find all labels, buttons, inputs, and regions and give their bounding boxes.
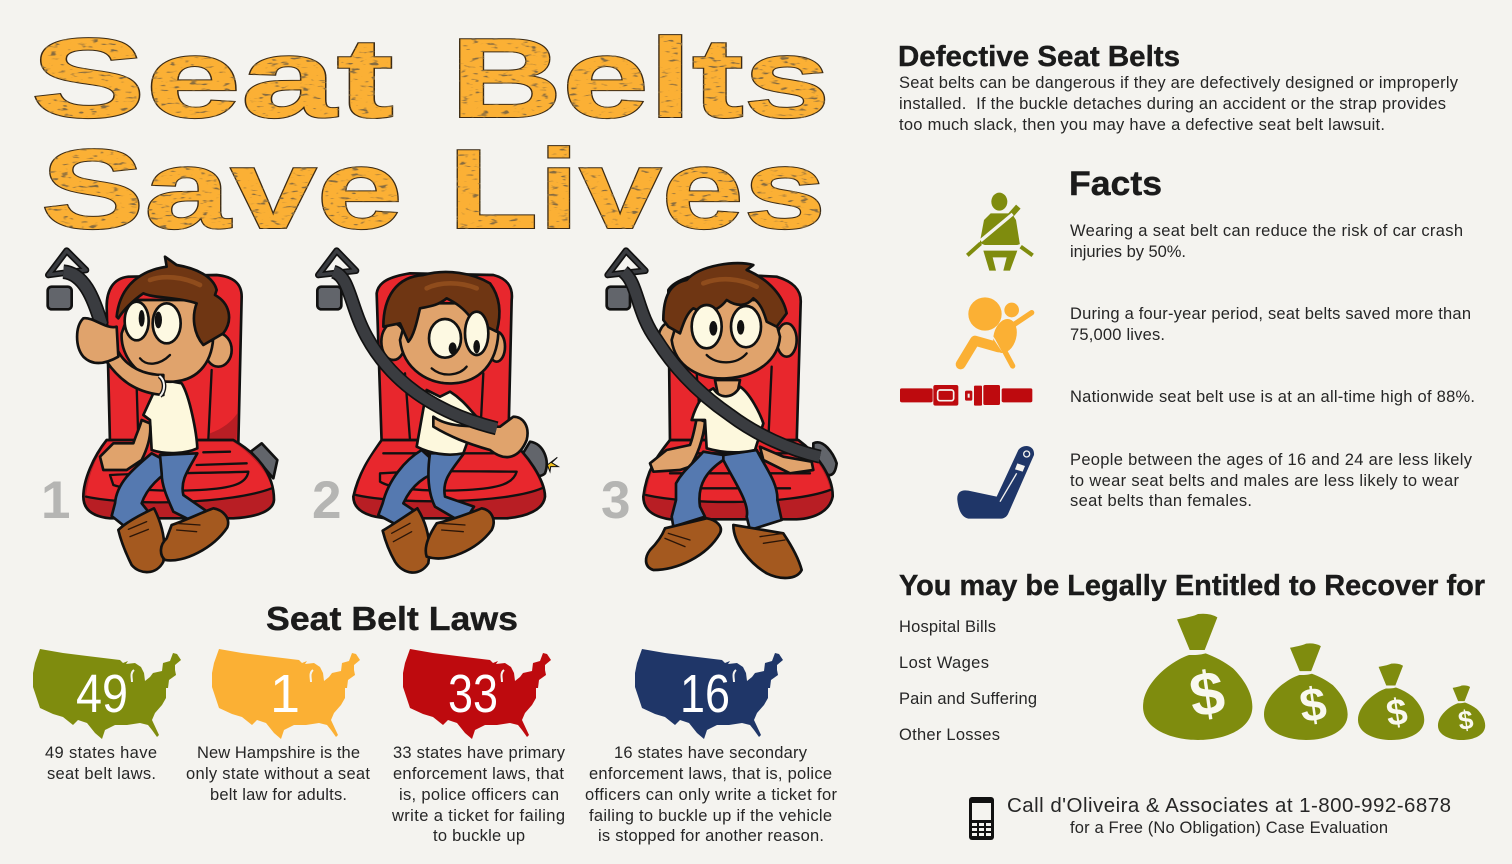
buckle receiver	[251, 443, 277, 478]
left leg	[378, 450, 443, 527]
icon: money bag small: $	[1384, 690, 1410, 734]
caption: secondary enforcement: 16 states have secondary	[614, 744, 808, 762]
left arm	[650, 418, 705, 472]
seat base	[643, 440, 833, 519]
lake notch	[132, 670, 134, 682]
seat back	[377, 273, 512, 443]
buckle receiver	[813, 442, 837, 475]
lake notch	[310, 670, 313, 682]
icon: seat	[957, 446, 1034, 519]
icon: red belt buckle	[900, 385, 1032, 406]
illustration: step 1 boy reaching for the belt	[41, 251, 277, 572]
call to action	[1007, 794, 1451, 837]
right shoe	[733, 525, 802, 578]
fact: lives saved: 75,000 lives.	[1070, 326, 1165, 344]
icon: money bag large: $	[1185, 658, 1229, 731]
icon: money bag smallest	[1438, 685, 1485, 740]
seat stripes	[697, 367, 772, 440]
left leg	[672, 452, 723, 527]
list: recoverable losses: Lost Wages	[899, 654, 989, 672]
fact: lives saved: During a four-year period, seat belts saved more than	[1070, 305, 1471, 323]
neck	[715, 380, 740, 397]
seat stripes	[405, 373, 483, 440]
right leg	[723, 450, 782, 530]
fact: young people and males	[1070, 451, 1473, 510]
shoe laces	[128, 522, 200, 537]
map: 33 states	[403, 649, 551, 739]
anchor triangle	[48, 251, 86, 275]
heading: facts: Facts	[1069, 165, 1162, 203]
face	[672, 300, 780, 378]
cushion stripes	[646, 453, 830, 502]
list: recoverable losses	[899, 618, 1037, 744]
hair	[383, 272, 499, 342]
sleeve cuff	[159, 376, 164, 396]
belt	[333, 272, 497, 428]
seat cushion top	[356, 442, 542, 501]
map: 16 states	[635, 649, 783, 739]
face	[400, 303, 498, 383]
list: recoverable losses: Other Losses	[899, 726, 1000, 744]
caption: New Hampshire: belt law for adults.	[210, 786, 347, 804]
right arm	[760, 447, 813, 473]
face	[122, 300, 213, 382]
caption: New Hampshire: only state without a seat	[186, 765, 370, 783]
fact: usage: Nationwide seat belt use is at an all-time high of 88%.	[1070, 388, 1475, 406]
title: Seat	[31, 14, 394, 141]
caption: primary enforcement	[391, 744, 566, 845]
number 49: 49	[76, 664, 128, 724]
icon: money bag medium	[1264, 643, 1348, 740]
hair	[117, 257, 229, 345]
hair highlight	[427, 283, 477, 288]
shirt	[417, 390, 477, 455]
lake notch	[734, 670, 736, 682]
number 1: 1	[270, 664, 300, 724]
cushion stripes	[356, 453, 542, 501]
icon: airbag	[961, 297, 1032, 366]
list: recoverable losses: Hospital Bills	[899, 618, 996, 636]
title	[31, 14, 830, 252]
fact: young people and males: to wear seat belts and males are less likely to wear	[1070, 472, 1460, 490]
seat cushion top	[646, 442, 830, 502]
text block: defective seat belts	[899, 74, 1459, 134]
right leg	[428, 453, 474, 523]
mouth	[432, 367, 467, 374]
heading: legally entitled: You may be Legally Entitled to Recover for	[899, 570, 1485, 602]
list: recoverable losses: Pain and Suffering	[899, 690, 1037, 708]
icon: money bag large	[1143, 614, 1252, 740]
lower arm and hand	[100, 420, 150, 470]
caption: New Hampshire	[186, 744, 370, 804]
seat stripes	[137, 370, 212, 440]
right shoe	[426, 508, 494, 558]
step number 2: 2	[312, 471, 341, 530]
fact: risk reduction	[1070, 222, 1463, 261]
icon: money bag smallest: $	[1456, 704, 1475, 736]
raised hand	[77, 318, 118, 363]
caption: secondary enforcement: enforcement laws, that is, police	[589, 765, 832, 783]
shirt	[692, 387, 763, 452]
left shoe	[118, 508, 164, 572]
belt	[623, 272, 820, 457]
anchor triangle	[318, 251, 356, 275]
buckle receiver	[520, 442, 547, 476]
anchor triangle	[608, 251, 645, 275]
left leg	[112, 453, 177, 527]
illustration: step 3 boy buckled in	[601, 251, 837, 578]
text block: defective seat belts: too much slack, then you may have a defective seat belt lawsuit.	[899, 116, 1385, 134]
call to action: Call d'Oliveira & Associates at 1-800-992-6878	[1007, 794, 1451, 817]
title: Belts	[450, 15, 830, 141]
icon: money bag small	[1358, 664, 1424, 740]
ears	[658, 323, 678, 357]
shoe laces	[665, 533, 785, 547]
caption: secondary enforcement: is stopped for another reason.	[598, 827, 824, 845]
left shoe	[646, 518, 721, 570]
shoe laces	[392, 523, 465, 542]
fact: young people and males: People between the ages of 16 and 24 are less likely	[1070, 451, 1473, 469]
caption: secondary enforcement	[585, 744, 838, 845]
seat back	[107, 275, 242, 443]
anchor triangle face	[318, 251, 356, 275]
seat base	[353, 440, 545, 518]
mouth	[140, 355, 170, 364]
number 33: 33	[448, 664, 498, 724]
ear	[205, 333, 232, 367]
step number 3: 3	[601, 471, 630, 530]
map: 1 state	[212, 649, 360, 739]
eyes	[125, 302, 149, 340]
mouth	[707, 353, 747, 362]
lake notch	[502, 670, 504, 682]
anchor clip	[607, 287, 630, 309]
anchor triangle face	[608, 251, 645, 275]
call to action: for a Free (No Obligation) Case Evaluation	[1070, 819, 1388, 837]
caption: primary enforcement: to buckle up	[433, 827, 525, 845]
number 16: 16	[680, 664, 730, 724]
buckle spark	[547, 457, 558, 472]
caption: primary enforcement: 33 states have primary	[393, 744, 566, 762]
icon: phone	[969, 797, 994, 840]
text block: defective seat belts: installed. If the buckle detaches during an accident or the strap provides	[899, 95, 1446, 113]
arm	[433, 417, 528, 457]
caption: primary enforcement: is, police officers can	[399, 786, 559, 804]
hair highlight	[150, 277, 200, 285]
icon: belted person	[967, 193, 1033, 271]
map: 49 states	[33, 649, 181, 739]
eyes	[692, 305, 722, 348]
ears	[381, 323, 405, 360]
heading: seat belt laws: Seat Belt Laws	[266, 600, 518, 637]
belt	[63, 272, 102, 325]
caption: 49 states: seat belt laws.	[47, 765, 156, 783]
caption: primary enforcement: enforcement laws, that	[393, 765, 564, 783]
caption: 49 states: 49 states have	[45, 744, 157, 762]
title: Save	[41, 125, 403, 252]
anchor triangle face	[48, 251, 86, 275]
illustration: step 2 boy pulling belt across	[312, 251, 558, 573]
cushion stripes	[86, 452, 272, 502]
eyes	[429, 319, 461, 358]
seat base	[83, 440, 274, 518]
step number 1: 1	[41, 471, 70, 530]
text block: defective seat belts: Seat belts can be dangerous if they are defectively designed or improperly	[899, 74, 1459, 92]
caption: secondary enforcement: officers can only write a ticket for	[585, 786, 838, 804]
title: Lives	[448, 126, 826, 252]
caption: primary enforcement: write a ticket for failing	[391, 807, 565, 825]
fact: risk reduction: Wearing a seat belt can reduce the risk of car crash	[1070, 222, 1463, 240]
hair highlight	[703, 279, 757, 287]
icon: money bag medium: $	[1296, 676, 1330, 732]
left shoe	[383, 508, 429, 573]
seat back	[668, 273, 801, 443]
shirt	[143, 380, 197, 453]
fact: young people and males: seat belts than females.	[1070, 492, 1252, 510]
hair	[663, 263, 787, 333]
seat cushion top	[86, 442, 272, 502]
caption: New Hampshire: New Hampshire is the	[197, 744, 360, 762]
fact: risk reduction: injuries by 50%.	[1070, 243, 1186, 261]
fact: lives saved	[1070, 305, 1471, 344]
caption: secondary enforcement: failing to buckle up if the vehicle	[589, 807, 832, 825]
raised arm	[107, 352, 163, 395]
anchor clip	[317, 287, 341, 309]
caption: 49 states	[45, 744, 157, 783]
seat back shading	[210, 413, 237, 440]
right leg	[160, 453, 207, 523]
heading: defective seat belts: Defective Seat Belts	[898, 41, 1180, 73]
right shoe	[161, 508, 228, 560]
anchor clip	[48, 287, 72, 309]
